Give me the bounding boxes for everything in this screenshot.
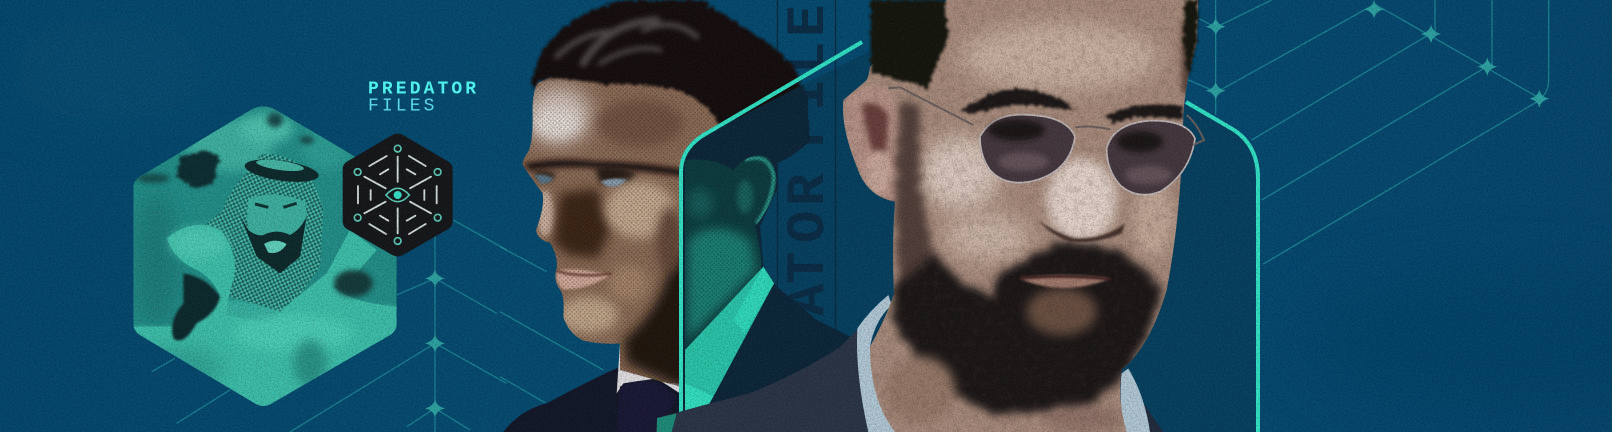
sunglasses: [888, 87, 1204, 195]
eyebrows: [958, 88, 1183, 123]
lower body light area: [133, 300, 397, 410]
nose underside: [1038, 220, 1125, 242]
title: Predator Files wordmark: FILES: [368, 96, 438, 116]
teal neck and ear: [685, 156, 776, 350]
network lines: right: [1188, 0, 1549, 264]
necktie: [617, 381, 677, 432]
vertical file label band: PREDATOR FILE: [779, 5, 840, 425]
network lines: left: [152, 220, 507, 432]
panel: translucent hexagon fill: [680, 0, 1258, 432]
sideburn: [895, 100, 932, 293]
shirt collar: [857, 295, 895, 432]
portrait: Saudi crown prince in teal hexagon: [130, 103, 400, 410]
portrait: Benalla: [657, 0, 1220, 432]
hair: [871, 0, 1198, 88]
robe and arms: [133, 225, 397, 410]
icon: Predator Files hexagon eye emblem: [343, 133, 453, 256]
ear: [845, 86, 899, 200]
hexagon base: [130, 103, 400, 410]
title: Predator Files wordmark: [368, 80, 479, 116]
jacket: [503, 367, 687, 432]
shirt collar: [617, 343, 680, 393]
chin patch below the lip: [1027, 288, 1097, 335]
face: [247, 194, 306, 244]
beard: [892, 242, 1162, 415]
teal collar: [685, 267, 774, 403]
lips: [1020, 275, 1110, 288]
head cord: [244, 160, 319, 182]
jacket: [657, 328, 903, 432]
portrait: Macron in natural colour: [503, 0, 807, 432]
headscarf: [205, 167, 323, 313]
hair: [532, 0, 807, 160]
dark shadow left: [172, 273, 220, 341]
panel outline: [681, 42, 1258, 432]
face with shading: [842, 0, 1198, 432]
face with shading: [522, 76, 720, 386]
portrait: Macron in teal duotone inside the panel: [680, 63, 850, 413]
back of head: [680, 63, 850, 413]
title: Predator Files wordmark: PREDATOR: [368, 80, 479, 100]
network lines: beside Macron: [500, 247, 603, 403]
skin mottling: [844, 0, 1184, 432]
